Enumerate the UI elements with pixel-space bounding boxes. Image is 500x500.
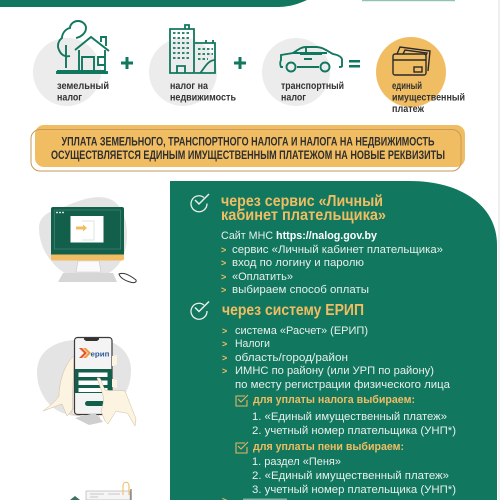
- icon: payment cards: [376, 37, 446, 107]
- logo text: ERIP: ерип: [90, 350, 110, 358]
- illustration: computer: [39, 197, 136, 283]
- text: penalty payment steps: 2. «Единый имущественный платеж»: [252, 470, 449, 482]
- text: penalty payment steps: 3. учетный номер плательщика (УНП*): [252, 484, 456, 496]
- top right cropped caption: [362, 0, 455, 1]
- bullets: ERIP: [222, 326, 227, 500]
- bullets: personal account: [221, 245, 226, 295]
- icon: car: [262, 38, 342, 106]
- label: property tax: недвижимость: [170, 92, 236, 104]
- icon: check circle 1: [191, 194, 209, 212]
- icon: penalty checkbox: [236, 442, 248, 453]
- bullets: personal account: >: [221, 245, 226, 255]
- text: personal account steps: «Оплатить»: [232, 271, 293, 283]
- bullets: ERIP: >: [222, 339, 227, 349]
- operator plus 1: [121, 57, 133, 69]
- panel: payment methods: [170, 181, 497, 500]
- bullets: ERIP: >: [222, 353, 227, 363]
- heading: personal account: кабинет плательщика»: [221, 207, 386, 224]
- text: personal account steps: [221, 230, 443, 296]
- bullets: personal account: >: [221, 285, 226, 295]
- text: penalty payment steps: 1. раздел «Пеня»: [252, 456, 341, 468]
- illustration: hands holding phone with ERIP: [37, 338, 136, 426]
- operator equals: [349, 60, 360, 68]
- illustration: document with paperclip: [70, 482, 131, 500]
- label: property tax: налог на: [170, 81, 208, 92]
- text: ERIP steps: [235, 325, 451, 391]
- text: personal account steps: вход по логину и паролю: [232, 257, 364, 269]
- label: transport tax: налог: [281, 92, 306, 104]
- text: personal account steps: сервис «Личный кабинет плательщика»: [232, 244, 443, 256]
- text: cropped next step: [243, 498, 287, 500]
- label: single property payment: платеж: [392, 104, 425, 115]
- text: ERIP steps: ИМНС по району (или УРП по району): [235, 365, 434, 377]
- text: personal account steps: Сайт МНС https://nalog.gov.by: [221, 230, 378, 242]
- label: land tax: земельный: [57, 81, 109, 92]
- label: single property payment: единый: [392, 81, 422, 92]
- text: tax payment steps: 1. «Единый имущественный платеж»: [252, 411, 447, 423]
- label: transport tax: транспортный: [281, 81, 344, 92]
- top green header band: [0, 0, 307, 7]
- text: ERIP steps: область/город/район: [235, 352, 348, 364]
- text: tax payment steps: [252, 411, 456, 437]
- bullets: personal account: >: [221, 272, 226, 282]
- subheading: penalty payment: для уплаты пени выбираем:: [253, 441, 404, 453]
- subheading: tax payment: для уплаты налога выбираем:: [253, 394, 415, 406]
- icon: check circle 2: [191, 302, 209, 319]
- icon: land tax house and tree: [33, 21, 109, 106]
- icon: tax checkbox: [236, 395, 248, 406]
- label: land tax: налог: [57, 92, 82, 104]
- bullets: personal account: >: [221, 258, 226, 268]
- text: tax payment steps: 2. учетный номер плательщика (УНП*): [252, 425, 456, 437]
- text: penalty payment steps: [252, 456, 456, 496]
- text: ERIP steps: система «Расчет» (ЕРИП): [235, 325, 368, 337]
- bullets: ERIP: >: [222, 326, 227, 336]
- heading: ERIP system: через систему ЕРИП: [222, 302, 364, 319]
- text: ERIP steps: по месту регистрации физического лица: [235, 379, 451, 391]
- text: personal account steps: выбираем способ оплаты: [232, 284, 369, 296]
- text: ERIP steps: Налоги: [235, 338, 270, 350]
- heading: personal account: через сервис «Личный: [221, 193, 383, 210]
- label: single property payment: имущественный: [392, 92, 465, 104]
- panel: tax types: [33, 21, 465, 115]
- icon: real estate buildings: [149, 25, 217, 106]
- bullets: ERIP: >: [222, 366, 227, 376]
- operator plus 2: [234, 57, 246, 69]
- callout banner: [31, 125, 465, 171]
